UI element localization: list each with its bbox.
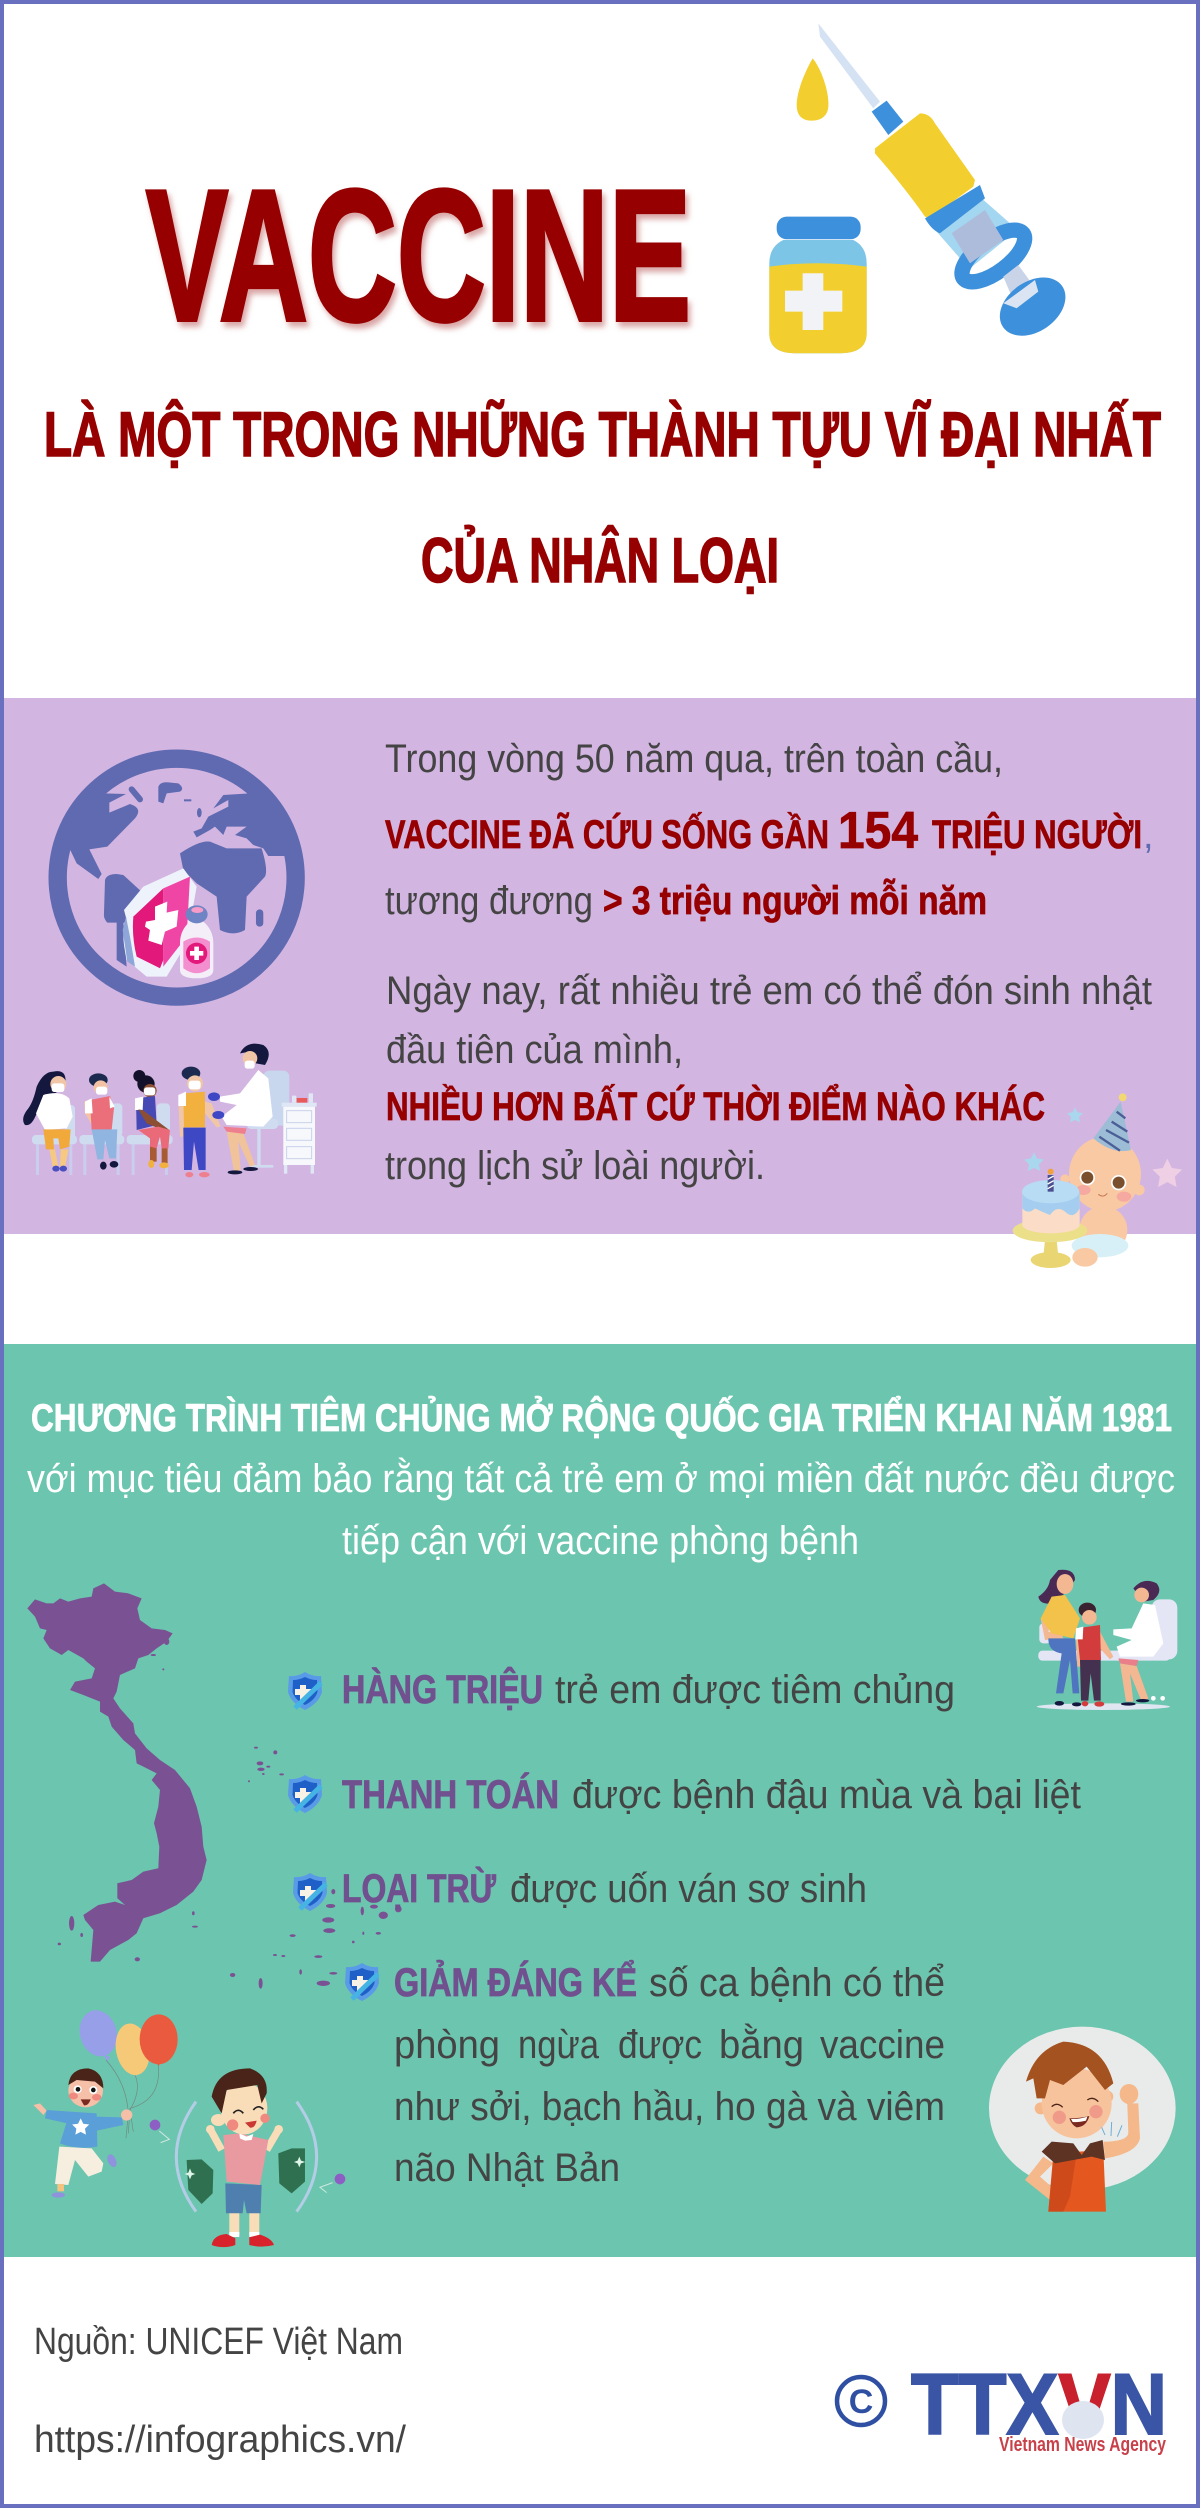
bullet: eliminated tetanus: được uốn ván sơ sinh [510,1867,867,1911]
icon: syringe [818,23,1076,348]
text block: global statistic: > 3 triệu người mỗi năm [603,877,987,923]
figure: doctor on stool [208,1044,289,1174]
bullet: reduced cases: GIẢM ĐÁNG KỂ [394,1958,637,2005]
bullet: eliminated tetanus: LOẠI TRỪ [342,1865,497,1911]
text block: global statistic: TRIỆU NGƯỜI [932,811,1142,857]
heading: programme [27,1395,1175,1563]
bullet: reduced cases: số ca bệnh có thể [649,1961,945,2005]
bullet: reduced cases [345,1958,945,2190]
panel: global impact [0,698,1200,1234]
illustration: mother, child and doctor [1037,1570,1177,1710]
text block: global statistic: 154 [838,802,918,860]
illustration: baby with birthday cake [1013,1093,1182,1268]
icon: viruses and arrows [150,2120,345,2193]
title: VACCINE: VACCINE [149,156,694,365]
figure: boy in pink vest [84,1073,118,1170]
icon: vaccine bottle [769,217,867,353]
panel: national immunisation programme [0,1344,1200,2257]
figure: doctor [1113,1581,1165,1706]
figure: boy receiving injection [178,1067,221,1177]
icon: globe with shield [58,759,296,997]
title: VACCINE [146,151,694,365]
text block: birthdays [385,969,1152,1188]
subtitle: CỦA NHÂN LOẠI [421,525,779,596]
subtitle [44,399,1161,596]
bullet: reduced cases: được [618,2023,702,2067]
title: VACCINE: VACCINE [146,151,691,360]
heading: programme: tiếp cận với vaccine phòng bệnh [342,1519,859,1563]
figure: medicine cabinet [282,1093,317,1174]
logo: TTXVN: C [849,2383,873,2421]
text block: birthdays: trong lịch sử loài người. [385,1144,765,1188]
icon: yellow drop [797,58,828,121]
map: Vietnam [27,1583,402,1989]
figure: girl in blue vest [133,1070,170,1168]
source note [34,2321,406,2461]
bullet: reduced cases: ngừa [518,2023,600,2067]
bullet: eradicated diseases: được bệnh đậu mùa và bại liệt [572,1773,1081,1817]
logo: TTXVN: TTXVN [911,2357,1167,2453]
bullet: reduced cases: vaccine [820,2023,945,2067]
text block: global statistic: VACCINE ĐÃ CỨU SỐNG GẦN [385,811,829,857]
bullet: eradicated diseases [288,1772,1081,1817]
source note: Nguồn: UNICEF Việt Nam [34,2321,403,2363]
figure: mother [1038,1570,1081,1706]
source note: https://infographics.vn/ [34,2419,406,2461]
bullet: eradicated diseases: THANH TOÁN [342,1772,559,1817]
illustration: children with balloons and shields [33,2006,345,2247]
bullet: reduced cases: bằng [719,2022,804,2067]
figure: boy with balloons [33,2006,178,2198]
text block: global statistic: Trong vòng 50 năm qua, trên toàn cầu, [385,737,1003,781]
bullet: reduced cases: não Nhật Bản [394,2146,620,2190]
figure: boy between shields [185,2068,305,2247]
bullet: reduced cases: như sởi, bạch hầu, ho gà và viêm [394,2085,945,2129]
text block: global statistic: tương đương [385,879,593,923]
bullet: eliminated tetanus [293,1865,867,1911]
text block: global statistic [385,737,1154,923]
figure: girl with long hair [23,1071,73,1172]
figure: boy [1075,1603,1113,1707]
list: achievements [288,1666,1081,2190]
text block: global statistic: , [1143,815,1154,857]
illustration: strong boy in circle [989,2027,1176,2212]
bullet: millions vaccinated [288,1666,955,1712]
text block: birthdays: đầu tiên của mình, [386,1028,683,1072]
bullet: millions vaccinated: HÀNG TRIỆU [342,1666,543,1712]
illustration: children being vaccinated [23,1044,317,1177]
bullet: millions vaccinated: trẻ em được tiêm chủng [555,1668,955,1712]
icon: protective arcs [176,2102,317,2212]
bullet: reduced cases: phòng [394,2023,500,2067]
